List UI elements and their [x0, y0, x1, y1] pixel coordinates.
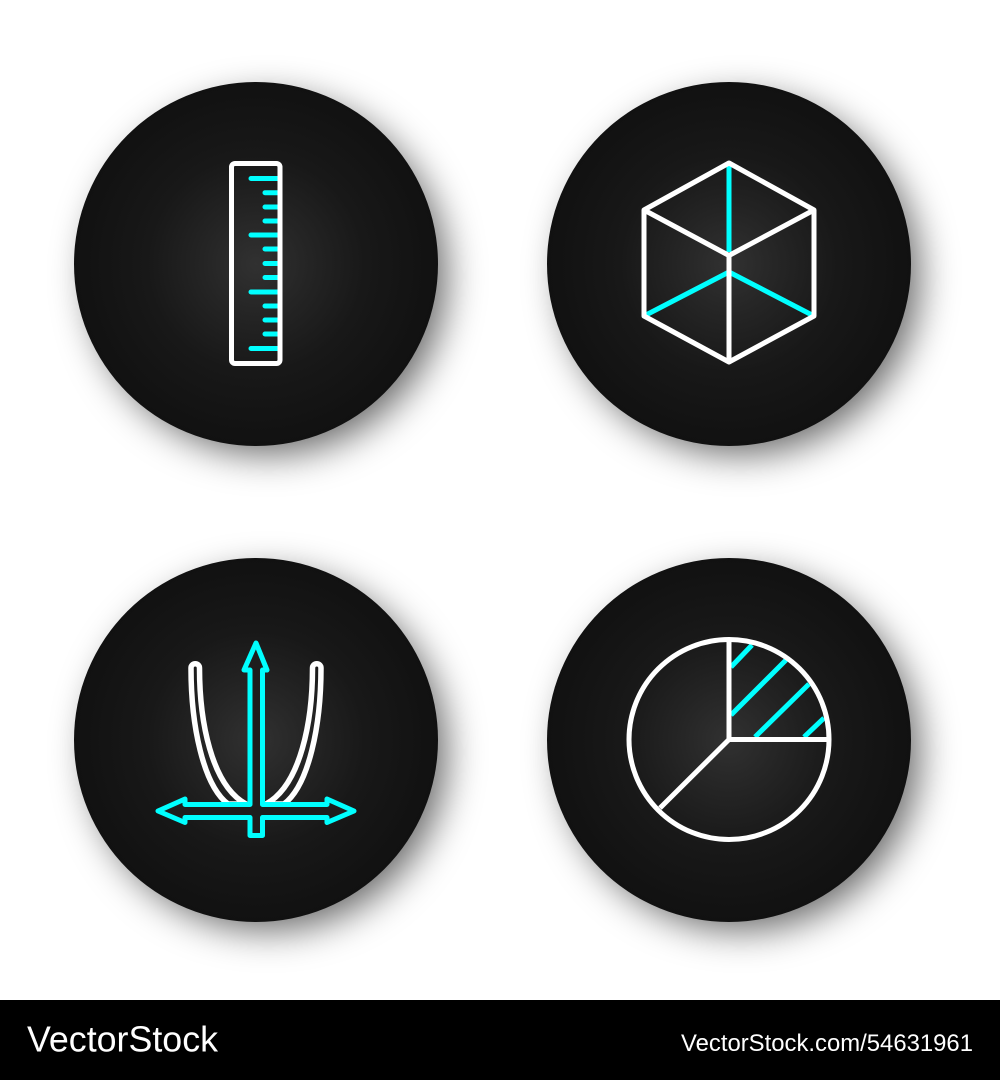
- parabola curve: [191, 664, 321, 804]
- watermark bar: [0, 1000, 1000, 1080]
- axes arrows: [158, 643, 354, 836]
- icon: cube: [644, 163, 814, 362]
- badge: ruler: [74, 82, 446, 454]
- logo text: VectorStock: [27, 1018, 219, 1060]
- badge: pie chart: [547, 558, 919, 930]
- badge: parabola: [74, 558, 446, 930]
- icon: ruler: [232, 164, 280, 364]
- icon: pie chart: [629, 640, 829, 840]
- badge: cube: [547, 82, 919, 454]
- image id: VectorStock.com/54631961: [681, 1030, 973, 1057]
- icon: parabola graph: [158, 643, 354, 836]
